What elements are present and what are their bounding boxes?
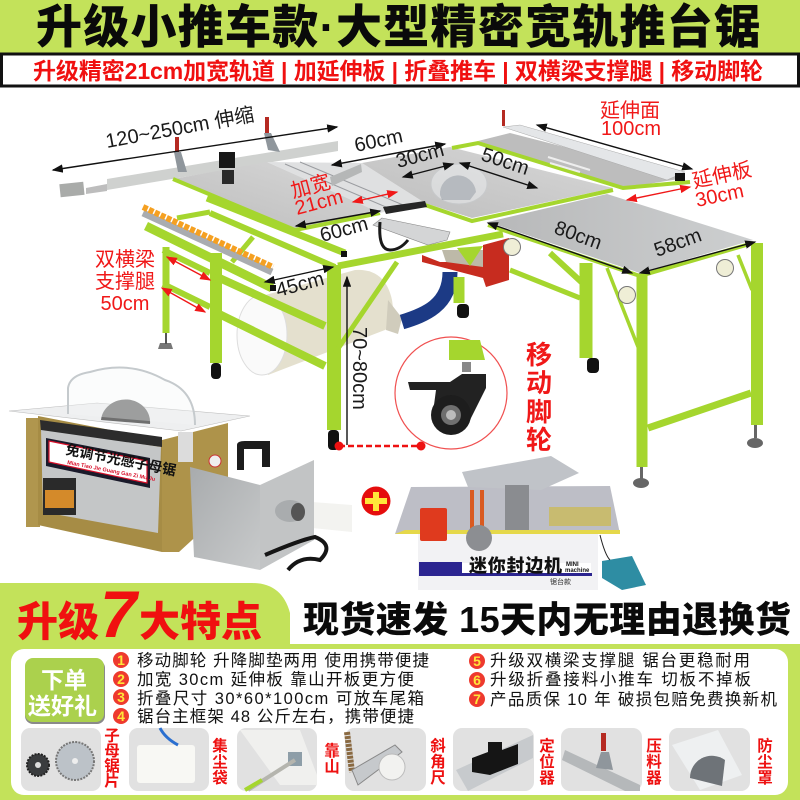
features heading: 大特点	[139, 599, 262, 645]
white stock strip	[290, 590, 800, 643]
clamps	[174, 117, 280, 184]
dimension labels: 双横梁	[95, 248, 155, 271]
feature list right: 升级折叠接料小推车 切板不掉板	[490, 670, 751, 689]
center saw table	[362, 147, 613, 221]
red motor block	[422, 238, 509, 287]
accessory: clamp: 器	[646, 770, 662, 787]
edge banding machine: 迷你封边机	[469, 555, 562, 576]
accessory: clamp	[561, 728, 662, 791]
caster callout	[334, 337, 507, 450]
accessory: locator: 定	[539, 736, 555, 755]
caster label	[526, 340, 552, 455]
feature list left: 移动脚轮 升降脚垫两用 使用携带便捷	[137, 651, 429, 670]
saw nameplate: 免调节光感子母锯	[64, 441, 177, 478]
accessory: saw blades: 锯	[104, 757, 120, 775]
accessory: clamp: 压	[646, 738, 662, 755]
dimension labels: 30cm	[693, 180, 746, 212]
beam end caps and wheels	[158, 251, 599, 450]
feature list right: 产品质保 10 年 破损包赔免费换新机	[490, 690, 778, 709]
delivery slogan: 现货速发 15天内无理由退换货	[303, 599, 791, 640]
table saw workbench	[53, 110, 763, 488]
adjustable feet	[633, 425, 763, 488]
accessory: saw blades: 片	[104, 772, 120, 790]
feature list left	[113, 651, 429, 726]
dimension labels: 80cm	[551, 217, 605, 254]
plus icon	[362, 486, 390, 516]
accessory: fence: 靠	[324, 742, 340, 760]
features heading: 升级	[17, 599, 99, 645]
dimension labels: 延伸面	[600, 99, 660, 122]
accessory: dust cover: 防	[757, 736, 773, 755]
features heading: 7	[100, 577, 140, 651]
dimension arrows	[53, 125, 755, 445]
large right table	[488, 194, 753, 276]
accessory: saw blades: 子	[104, 728, 120, 745]
dimension labels: 延伸板	[690, 158, 754, 193]
white feature panel	[11, 649, 788, 795]
dimension labels: 21cm	[293, 186, 346, 220]
dimension labels: 30cm	[394, 139, 447, 173]
dimension labels: 100cm	[601, 118, 661, 140]
feature list right: 升级双横梁支撑腿 锯台更稳耐用	[490, 651, 750, 670]
feature list left: 1	[117, 652, 125, 668]
dust bag	[237, 270, 402, 375]
feature list left: 加宽 30cm 延伸板 靠山开板更方便	[137, 670, 414, 689]
accessory: dust cover	[669, 728, 773, 791]
accessory: saw blades: 母	[104, 743, 120, 760]
dimension labels: 60cm	[352, 125, 405, 157]
accessory: dust cover: 罩	[757, 769, 773, 787]
dimension labels: 支撑腿	[95, 270, 155, 293]
green bottom panel	[0, 583, 800, 800]
dimension labels: 58cm	[651, 224, 705, 262]
accessory: locator: 位	[539, 752, 555, 771]
blue hose	[402, 272, 450, 322]
feature list right: 7	[473, 691, 481, 707]
dimension labels: 加宽	[288, 170, 333, 203]
long front beam	[338, 234, 503, 266]
small fence on sliding table	[330, 164, 362, 186]
feature list left: 折叠尺寸 30*60*100cm 可放车尾箱	[137, 689, 424, 708]
accessory: fence: 山	[324, 758, 340, 776]
features heading	[17, 577, 262, 651]
mini table saw	[9, 368, 250, 552]
title banner: 升级小推车款·大型精密宽轨推台锯	[36, 1, 760, 53]
dimension labels: 50cm	[101, 293, 149, 315]
feature list right	[469, 651, 778, 709]
accessory: dust bag: 尘	[212, 753, 228, 771]
gift badge	[25, 658, 105, 724]
subtitle box: 升级精密21cm加宽轨道 | 加延伸板 | 折叠推车 | 双横梁支撑腿 | 移动脚轮	[33, 58, 763, 84]
saw nameplate	[46, 438, 177, 488]
dimension labels: 45cm	[274, 268, 327, 302]
left sliding table	[173, 162, 380, 230]
accessory: miter gauge: 角	[430, 752, 446, 771]
accessory: dust bag: 集	[212, 736, 228, 755]
accessory: dust bag	[129, 728, 228, 791]
right extension panel	[452, 110, 690, 188]
accessory: miter gauge	[345, 728, 446, 791]
edge banding machine: 锯台款	[550, 577, 571, 586]
accessory: miter gauge: 尺	[430, 770, 446, 787]
dimension labels	[95, 99, 754, 410]
feature list left: 锯台主框架 48 公斤左右，携带便捷	[137, 707, 414, 726]
folding cart	[373, 201, 450, 250]
caster label: 轮	[526, 425, 552, 455]
accessory: saw blades	[21, 728, 120, 791]
edge banding machine: MINI	[566, 562, 579, 568]
right legs and braces	[510, 243, 757, 467]
rail section	[267, 162, 425, 213]
dimension labels: 60cm	[318, 213, 371, 247]
gift badge: 下单	[41, 667, 87, 693]
accessory: clamp: 料	[646, 753, 662, 771]
feature list left: 4	[117, 708, 125, 724]
caster label: 脚	[526, 397, 552, 427]
edge banding machine: machine	[565, 568, 590, 574]
caster label: 移	[526, 340, 552, 370]
accessory: dust bag: 袋	[212, 769, 228, 787]
accessory: locator	[453, 728, 555, 791]
dimension labels: 120~250cm 伸缩	[104, 103, 256, 153]
dimension labels: 50cm	[478, 144, 532, 180]
left support legs and beams	[146, 198, 459, 430]
dimension labels: 70~80cm	[348, 327, 370, 410]
accessory: dust cover: 尘	[757, 753, 773, 771]
saw nameplate: Mian Tiao Jie Guang Gan Zi Mu Ju	[67, 460, 156, 483]
feature list right: 6	[473, 672, 481, 688]
feature list left: 2	[117, 671, 125, 687]
accessory: miter gauge: 斜	[430, 736, 446, 755]
feature list right: 5	[473, 653, 481, 669]
white casters	[504, 238, 734, 304]
dust extractor	[190, 441, 352, 570]
caster label: 动	[526, 368, 552, 398]
accessory: fence	[237, 728, 340, 791]
feature list left: 3	[117, 689, 125, 705]
roller bar	[143, 207, 273, 272]
edge banding machine	[395, 456, 646, 590]
gift badge: 送好礼	[28, 693, 97, 719]
left extension fence	[59, 141, 338, 197]
accessory: locator: 器	[539, 770, 555, 787]
